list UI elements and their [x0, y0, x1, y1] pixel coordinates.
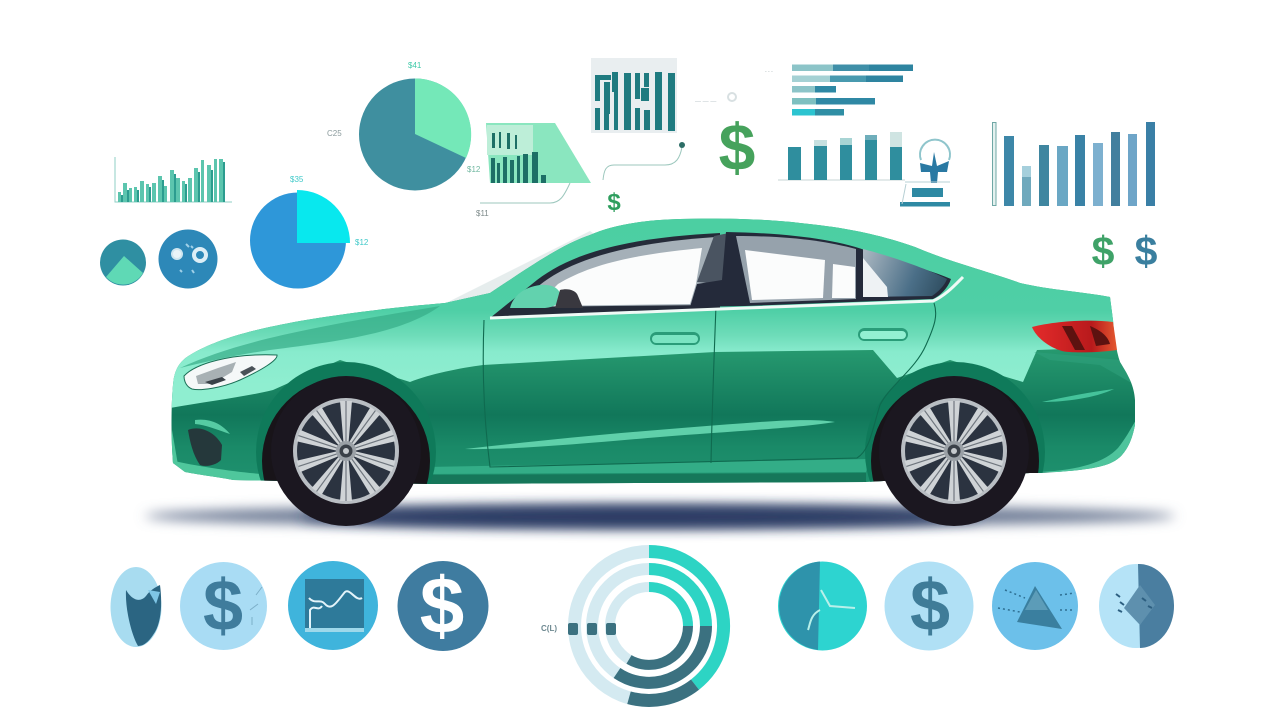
side mirror	[510, 285, 583, 308]
pie chart: blue and cyan	[250, 175, 369, 288]
front window	[490, 233, 729, 318]
ring legend: C(L)	[541, 624, 557, 633]
horizontal stacked bars: - - -	[765, 69, 773, 75]
pie chart: teal and mint	[327, 61, 481, 190]
bottom icon 2: dollar circle	[180, 562, 267, 650]
connector lines	[480, 147, 682, 203]
hood crease	[180, 306, 440, 368]
vertical bar chart: teal	[778, 132, 905, 180]
car illustration	[172, 218, 1135, 526]
dollar sign: blue right: $	[1135, 228, 1158, 274]
pie labels: $41	[408, 61, 422, 70]
rear window	[690, 232, 951, 307]
bottom icon 4: white dollar circle: $	[420, 561, 464, 650]
bottom icon 3: line chart circle	[288, 561, 378, 650]
door lines	[483, 303, 936, 467]
bottom icon 5: teal split circle	[778, 562, 867, 650]
blue pie labels: $12	[355, 238, 369, 247]
front bumper lip	[172, 460, 262, 481]
ring legend	[541, 623, 616, 635]
small teal bar chart	[115, 157, 232, 202]
front wheel	[271, 376, 421, 526]
pie labels: $12	[467, 165, 481, 174]
windshield glass	[440, 231, 600, 306]
tail light	[1032, 321, 1117, 352]
horizontal stacked bars	[765, 64, 913, 116]
small donut icon: teal and mint	[100, 240, 146, 286]
ring chart	[541, 552, 724, 700]
blue pie labels: $35	[290, 175, 304, 184]
sill	[425, 459, 870, 474]
door handles	[650, 328, 908, 345]
large dollar sign: green: $	[719, 110, 755, 184]
pedestal icon	[900, 140, 950, 206]
mint trapezoid chart: $11	[476, 209, 489, 218]
rear wheel	[879, 376, 1029, 526]
dollar sign: green right: $	[1092, 228, 1115, 274]
bottom icon 2: dollar circle: $	[203, 566, 243, 646]
mint trapezoid chart	[476, 123, 591, 218]
small gauge marker	[679, 93, 736, 148]
blue pie labels	[290, 175, 369, 247]
pie labels: C25	[327, 129, 342, 138]
bottom icon 7: pyramid circle	[992, 562, 1078, 650]
bottom icon 8: split circle	[1099, 564, 1174, 648]
wheel arch bands	[256, 362, 436, 484]
bottom icon 1: leaf ellipse	[110, 567, 162, 647]
small dollar sign: green: $	[607, 189, 621, 216]
bottom icon 6: dollar circle: $	[910, 566, 950, 646]
bottom icon 4: white dollar circle	[398, 561, 488, 651]
window sill chrome line	[490, 277, 963, 318]
upper light body panel	[160, 212, 1150, 410]
car body	[172, 218, 1135, 484]
front grille	[188, 428, 222, 466]
infographic canvas	[100, 58, 1178, 707]
bottom icon 6: dollar circle	[884, 562, 974, 650]
pie labels	[327, 61, 481, 174]
lower door highlight	[465, 420, 835, 449]
ground shadow	[145, 505, 1175, 528]
small gauge marker: — — —	[695, 99, 716, 105]
vertical bar chart: blue	[992, 122, 1155, 206]
small circle icon: blue	[158, 230, 218, 288]
rear bumper highlight	[1042, 389, 1114, 402]
headlight	[184, 355, 277, 390]
striped data box	[591, 58, 677, 133]
